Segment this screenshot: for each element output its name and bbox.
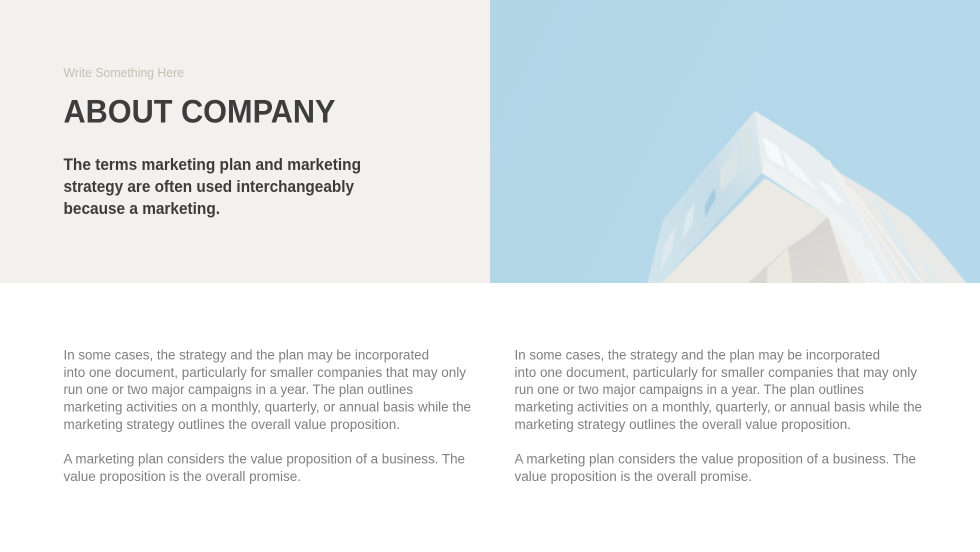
panel: text block right: value proposition is the overall promise. [514,469,752,484]
panel: text block left: into one document, particularly for smaller companies that may only [64,365,466,380]
panel: text block left: run one or two major campaigns in a year. The plan outlines [64,382,413,397]
building front band [831,220,872,283]
panel: text block right: into one document, particularly for smaller companies that may only [514,365,917,380]
building windows [764,138,784,166]
building cream stripes [842,176,964,283]
photo: building against sky [490,0,980,284]
panel: text block right: marketing strategy outlines the overall value proposition. [514,417,851,432]
panel: text block right: marketing activities on a monthly, quarterly, or annual basis while the [514,400,922,414]
panel: text block right: run one or two major campaigns in a year. The plan outlines [514,382,864,397]
building stripe lines [828,160,923,284]
building left glass facade [647,111,762,284]
subheading: strategy are often used interchangeably [64,178,355,196]
subheading: because a marketing. [64,200,220,218]
panel: text block left: In some cases, the strategy and the plan may be incorporated [64,348,429,362]
panel: text block right: A marketing plan considers the value proposition of a business. The [514,452,916,466]
building stone panel [767,248,793,284]
building soffit [660,178,828,284]
title: ABOUT COMPANY [64,94,336,130]
panel: text block left: marketing strategy outlines the overall value proposition. [64,417,400,432]
building stone wall [747,217,850,284]
panel: text block left: marketing activities on a monthly, quarterly, or annual basis while the [64,400,471,414]
subheading [64,156,361,218]
subheading: The terms marketing plan and marketing [64,156,361,174]
building right facade [754,111,905,283]
panel: text block right: In some cases, the strategy and the plan may be incorporated [514,348,880,362]
panel: text block left [64,348,471,484]
panel: text block right [514,348,922,484]
panel: heading background [0,0,490,283]
panel: text block left: value proposition is the overall promise. [64,469,301,484]
kicker text: Write Something Here [64,66,184,80]
panel: text block left: A marketing plan considers the value proposition of a business. The [64,452,465,466]
building glass panes [740,128,753,170]
